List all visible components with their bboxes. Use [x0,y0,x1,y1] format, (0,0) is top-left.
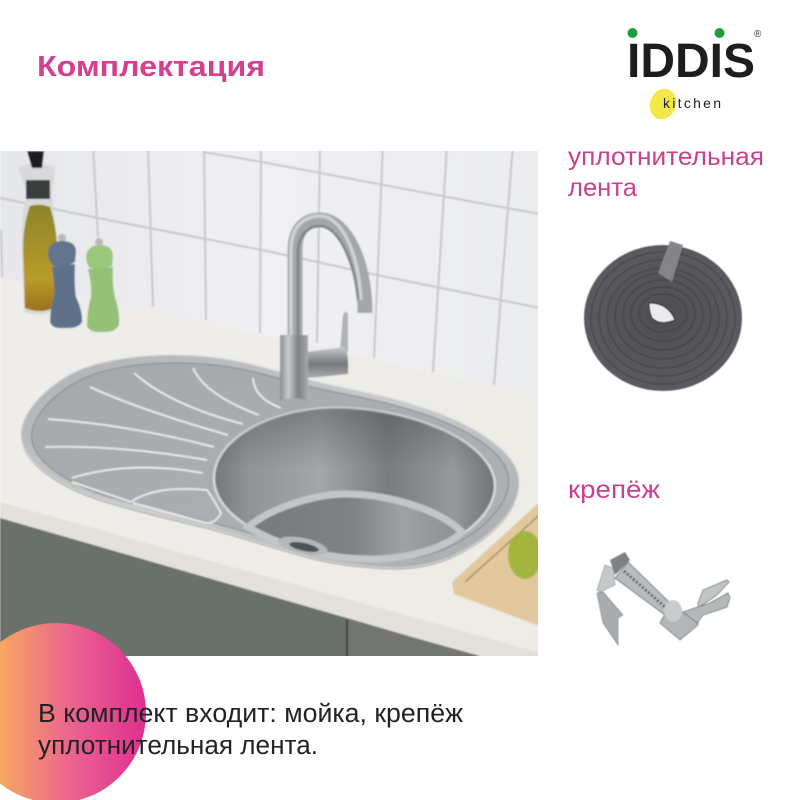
clamp lower jaw [597,592,623,645]
faucet highlight [291,216,361,335]
bowl basin [248,494,462,559]
label: sealing tape: уплотнительная [568,143,764,171]
logo kitchen word: kitchen [663,95,721,111]
tape centre hole [649,303,675,323]
logo registered mark: ® [754,29,762,40]
faucet base [280,398,306,408]
logo wordmark: IDDIS [627,35,755,88]
gradient circle [0,623,146,800]
photo: kitchen sink [0,151,538,656]
bottom text line 2: уплотнительная лента. [38,732,318,760]
clamp wheel [664,600,682,622]
faucet spout [295,220,365,340]
label: sealing tape line 2: лента [568,174,637,202]
bottom text [38,700,463,760]
faucet body [280,335,308,405]
bowl [212,406,497,532]
bottom text line 1: В комплект входит: мойка, крепёж [38,700,463,728]
logo green dot left [628,28,638,38]
cabinets [0,518,490,660]
sink rim [21,355,519,568]
tape strip [658,241,683,282]
title: Комплектация [37,51,265,83]
clamp prong lower [683,593,730,623]
icon: sealing tape roll [584,241,742,391]
logo yellow blob [645,85,681,123]
faucet [278,216,365,410]
icon: fastener clamp [597,552,730,645]
logo green dot right [714,28,724,38]
sink [21,355,519,570]
clamp knot [610,552,630,575]
faucet handle [306,347,348,378]
blue pepper mill [48,234,82,328]
cutting board [452,502,538,626]
faucet lever [340,312,348,352]
tiled wall [0,145,545,405]
label: fasteners: крепёж [568,476,660,504]
drainboard grooves [45,368,281,523]
countertop [0,277,545,670]
tape coil [584,245,742,391]
green pepper mill [86,238,119,332]
drainboard [31,363,509,560]
logo: IDDIS kitchen [627,28,762,123]
clamp bar [615,562,670,615]
faucet shadow [298,226,358,335]
drain [279,536,328,556]
sink shadow [23,446,514,570]
clamp base [660,610,698,640]
clamp bar holes [624,571,666,608]
tape rings [591,252,735,384]
counter front edge [0,502,538,656]
clamp prong upper [698,580,729,608]
oil bottle [18,151,57,315]
bowl shading [220,407,482,458]
clamp upper jaw [597,565,615,592]
green pepper [508,531,542,579]
